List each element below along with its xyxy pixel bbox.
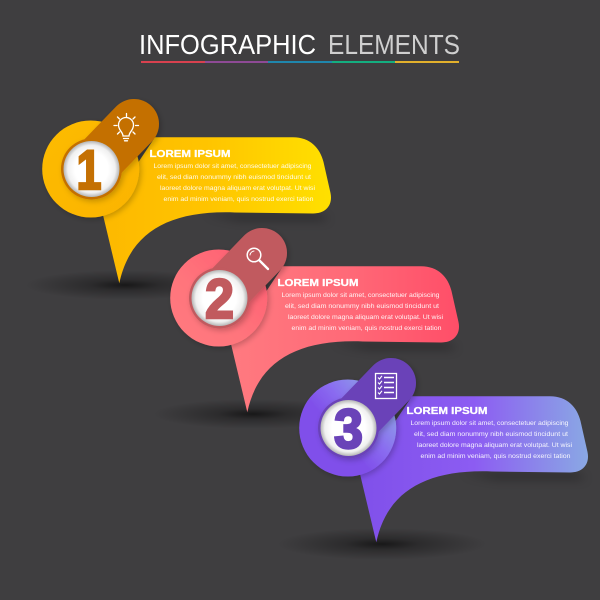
text block 2: [282, 292, 443, 332]
body shadow 2: [333, 343, 458, 349]
pill 3: [318, 383, 391, 458]
body shadow 3: [462, 473, 587, 479]
text block 1: enim ad minim veniam, quis nostrud exerci tation: [164, 196, 314, 203]
number disc 1: [64, 141, 120, 197]
number 1: 1: [76, 138, 102, 201]
number disc 3: [320, 400, 376, 456]
ground shadow 2: [153, 399, 353, 429]
pill 2: [189, 253, 262, 328]
text block 2: enim ad minim veniam, quis nostrud exerci tation: [292, 325, 442, 332]
heading 2: LOREM IPSUM: [278, 277, 359, 289]
text block 2: laoreet dolore magna aliquam erat volutpat. Ut wisi: [288, 314, 443, 321]
text block 2: elit, sed diam nonummy nibh euismod tincidunt ut: [285, 303, 439, 310]
icon: magnifier: [247, 248, 268, 269]
big circle 1: [42, 120, 139, 218]
number 2: 2: [205, 267, 234, 330]
text block 2: Lorem ipsum dolor sit amet, consectetuer adipiscing: [282, 292, 440, 299]
title rainbow underline: [141, 61, 459, 63]
text block 3: Lorem ipsum dolor sit amet, consectetuer adipiscing: [410, 420, 569, 427]
title: INFOGRAPHIC: [139, 29, 316, 60]
text block 3: laoreet dolore magna aliquam erat volutpat. Ut wisi: [417, 442, 572, 449]
speech bubble 2: [231, 266, 459, 412]
speech bubble 3: [360, 396, 588, 542]
heading 1: LOREM IPSUM: [150, 148, 231, 160]
icon: checklist: [376, 374, 396, 398]
number 3: 3: [334, 397, 363, 460]
ground shadow 3: [277, 528, 487, 560]
text block 1: laoreet dolore magna aliquam erat volutpat. Ut wisi: [160, 185, 315, 192]
number disc 2: [192, 270, 248, 326]
ground shadow 1: [25, 270, 225, 300]
panel: step 3: [277, 374, 588, 560]
heading 3: LOREM IPSUM: [406, 405, 488, 417]
text block 1: elit, sed diam nonummy nibh euismod tincidunt ut: [157, 174, 311, 181]
text block 3: [410, 420, 572, 460]
icon: light bulb: [114, 114, 138, 141]
speech bubble 1: [103, 137, 331, 283]
panel: step 2: [153, 248, 459, 429]
text block 3: elit, sed diam nonummy nibh euismod tincidunt ut: [414, 431, 568, 438]
pill 1: [61, 124, 134, 200]
text block 1: [154, 163, 315, 203]
body shadow 1: [205, 214, 330, 220]
big circle 3: [299, 380, 396, 476]
big circle 2: [170, 250, 267, 346]
title: ELEMENTS: [328, 29, 460, 60]
title: [139, 29, 460, 60]
panel: step 1: [25, 114, 331, 300]
text block 3: enim ad minim veniam, quis nostrud exerci tation: [420, 453, 571, 460]
text block 1: Lorem ipsum dolor sit amet, consectetuer adipiscing: [154, 163, 312, 170]
